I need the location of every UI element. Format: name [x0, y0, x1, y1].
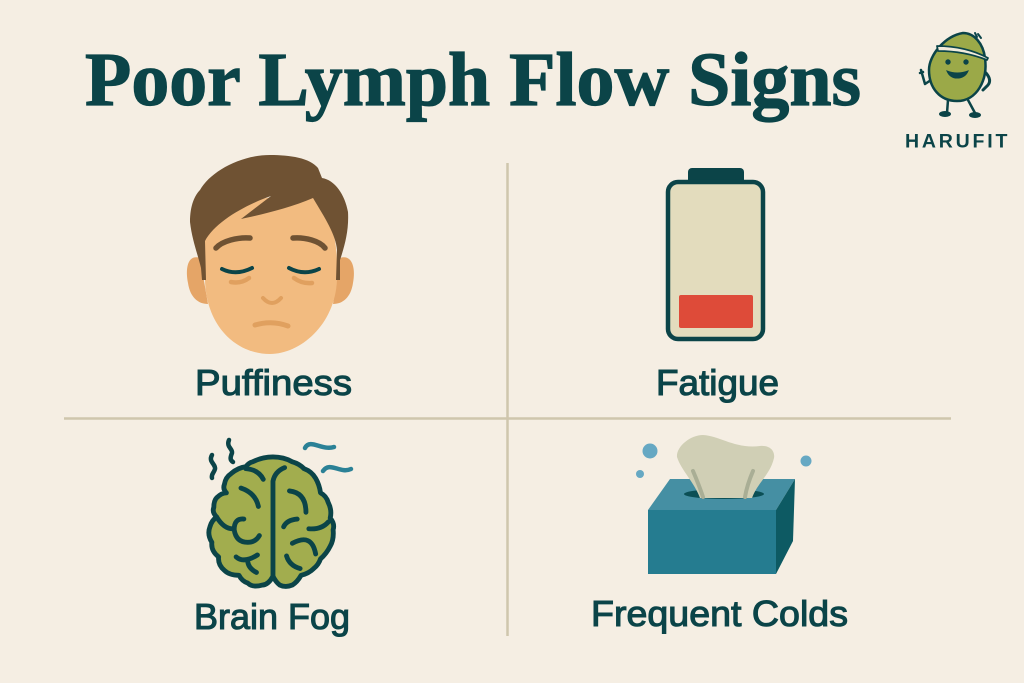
label: Puffiness: Puffiness — [195, 362, 352, 403]
label: Frequent Colds: Frequent Colds — [591, 593, 848, 634]
title: Poor Lymph Flow Signs — [85, 38, 861, 122]
icon: brain — [209, 440, 351, 586]
icon: mascot logo — [905, 33, 1010, 152]
label: Brain Fog: Brain Fog — [194, 596, 350, 637]
icon: tissue box — [636, 435, 812, 574]
label: Fatigue: Fatigue — [656, 362, 779, 403]
brand name: HARUFIT — [905, 130, 1010, 152]
icon: puffy face — [187, 155, 354, 354]
icon: low battery — [668, 168, 763, 339]
